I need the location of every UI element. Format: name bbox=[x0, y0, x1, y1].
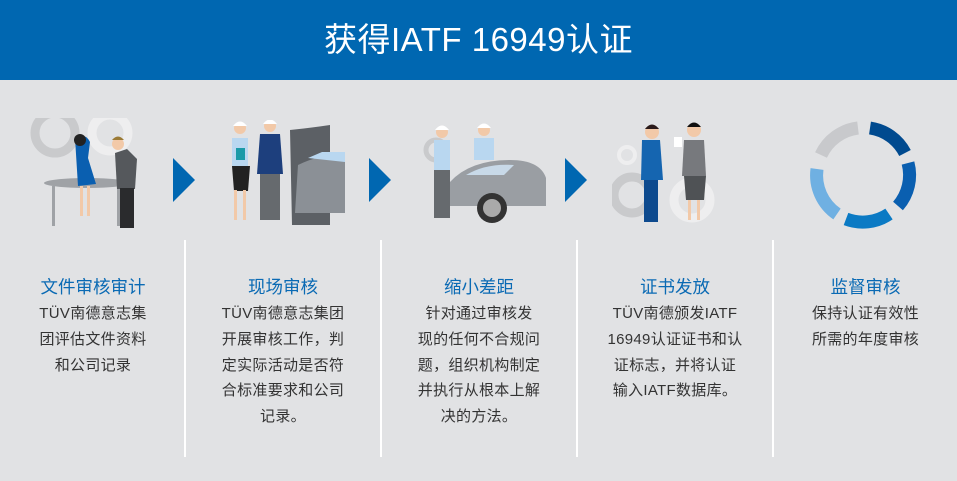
illustration: certificate handover bbox=[612, 122, 714, 222]
column 4 text bbox=[607, 277, 742, 399]
column 2 text: 合标准要求和公司 bbox=[222, 382, 344, 399]
column 3 text: 并执行从根本上解 bbox=[418, 382, 540, 399]
arrow 1 bbox=[173, 158, 195, 202]
column 2 text: TÜV南德意志集团 bbox=[222, 305, 344, 322]
column 1 text: 文件审核审计 bbox=[40, 277, 146, 297]
column 4 text: 输入IATF数据库。 bbox=[613, 382, 737, 399]
column 1 text: TÜV南德意志集 bbox=[39, 305, 147, 322]
icon: cycle ring bbox=[810, 122, 916, 229]
column 5 text: 所需的年度审核 bbox=[812, 331, 919, 348]
illustration: document review bbox=[30, 118, 137, 228]
column 3 text: 题，组织机构制定 bbox=[418, 357, 540, 374]
column 5 text bbox=[812, 277, 919, 348]
column 2 text bbox=[222, 277, 344, 425]
title bbox=[0, 0, 957, 80]
column 3 text: 现的任何不合规问 bbox=[418, 331, 540, 348]
column 4 text: 证书发放 bbox=[640, 277, 710, 297]
column 2 text: 开展审核工作，判 bbox=[222, 331, 344, 348]
column 3 text: 决的方法。 bbox=[441, 408, 517, 425]
column 4 text: TÜV南德颁发IATF bbox=[613, 305, 737, 322]
illustration: reduce gap bbox=[424, 124, 546, 223]
arrow 2 bbox=[369, 158, 391, 202]
column 1 text bbox=[39, 277, 147, 374]
column 3 text bbox=[418, 277, 540, 425]
column 2 text: 现场审核 bbox=[248, 277, 318, 297]
column 5 text: 监督审核 bbox=[830, 277, 900, 297]
column 1 text: 和公司记录 bbox=[55, 357, 131, 374]
column 5 text: 保持认证有效性 bbox=[812, 305, 919, 322]
arrow 3 bbox=[565, 158, 587, 202]
title: 获得IATF 16949认证 bbox=[324, 21, 633, 58]
column 4 text: 16949认证证书和认 bbox=[607, 331, 742, 348]
column 3 text: 缩小差距 bbox=[444, 277, 514, 297]
column 1 text: 团评估文件资料 bbox=[39, 331, 147, 348]
column 4 text: 证标志，并将认证 bbox=[614, 357, 736, 374]
dividers bbox=[184, 240, 186, 457]
illustration: onsite audit bbox=[232, 120, 345, 225]
column 2 text: 记录。 bbox=[260, 408, 306, 425]
column 3 text: 针对通过审核发 bbox=[425, 305, 533, 322]
column 2 text: 定实际活动是否符 bbox=[222, 357, 344, 374]
